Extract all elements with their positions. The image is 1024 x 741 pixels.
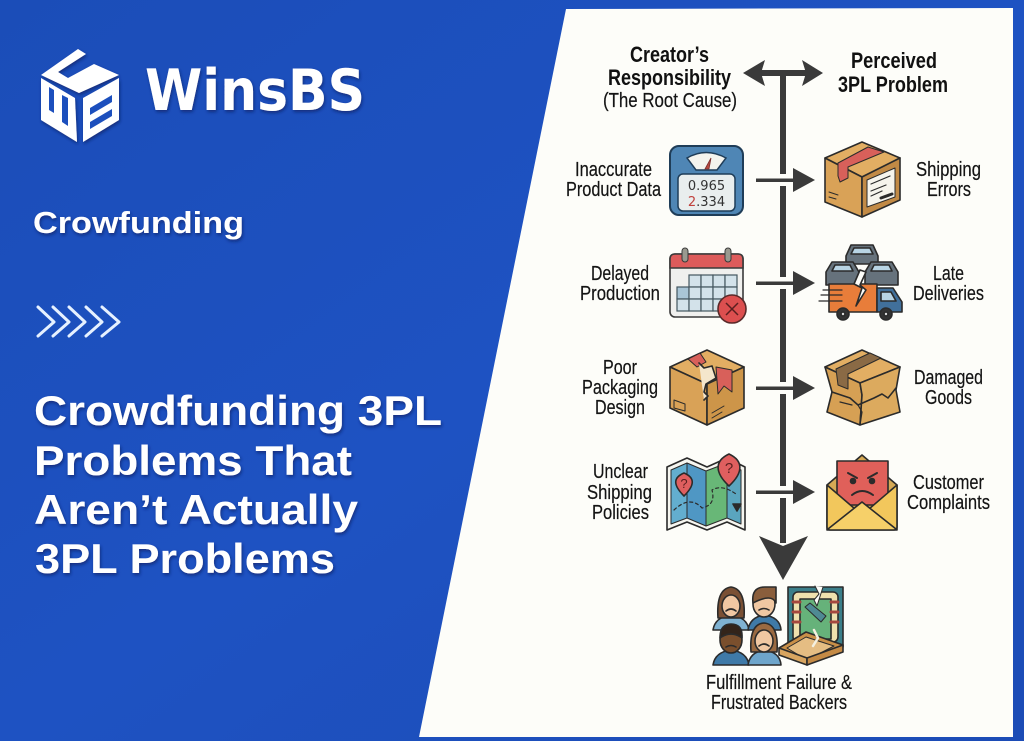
- icon: map with question pins: ?: [680, 476, 688, 491]
- row 4: [587, 454, 990, 530]
- text: customer complaints: Customer: [913, 472, 984, 494]
- arrow: row 2: [756, 271, 815, 295]
- text: poor packaging design: Packaging: [582, 377, 658, 399]
- text: customer complaints: Complaints: [907, 492, 990, 514]
- column heading: creator's responsibility: [603, 42, 737, 112]
- arrow: row 3: [756, 376, 815, 400]
- text: late deliveries: Deliveries: [913, 283, 984, 305]
- icon: angry envelope: [827, 455, 897, 530]
- text: damaged goods: [914, 367, 983, 409]
- person 2: [748, 587, 781, 630]
- icon: scale: [670, 146, 743, 215]
- row 2: [580, 245, 984, 323]
- text: fulfillment failure and frustrated backers: Frustrated Backers: [711, 692, 847, 714]
- text: shipping errors: Errors: [927, 179, 971, 201]
- text: poor packaging design: Design: [595, 397, 645, 419]
- text: inaccurate product data: [566, 159, 662, 201]
- column heading: perceived 3PL problem: [838, 48, 948, 97]
- person 1: [713, 587, 749, 630]
- text: inaccurate product data: Inaccurate: [575, 159, 652, 181]
- text: unclear shipping policies: [587, 461, 652, 524]
- icon: damaged box: [825, 350, 900, 425]
- icon: shipping box: [825, 142, 900, 217]
- title: 3PL Problems: [35, 535, 335, 582]
- title: Problems That: [34, 437, 352, 484]
- text: shipping errors: [916, 159, 981, 201]
- category label: Crowfunding: [33, 205, 244, 240]
- open box: [779, 630, 843, 665]
- title: Crowdfunding 3PL: [34, 387, 442, 434]
- column heading: creator's responsibility: Responsibility: [608, 65, 732, 90]
- text: poor packaging design: [582, 357, 658, 419]
- text: delayed production: [580, 263, 660, 305]
- icon: delayed truck: [819, 245, 902, 320]
- logo: WinsBS: [41, 49, 365, 142]
- icon: chevrons: [38, 307, 119, 336]
- title: [34, 387, 442, 582]
- row 1: [566, 142, 981, 217]
- text: delayed production: Production: [580, 283, 660, 305]
- text: shipping errors: Shipping: [916, 159, 981, 181]
- text: unclear shipping policies: Unclear: [593, 461, 648, 483]
- column heading: perceived 3PL problem: 3PL Problem: [838, 72, 948, 97]
- row 3: [582, 350, 983, 425]
- panel: white diagram sheet: [419, 8, 1013, 737]
- title: Aren’t Actually: [34, 486, 359, 533]
- arrow: central spine with two-way top and big down arrow: [743, 60, 823, 580]
- column heading: perceived 3PL problem: Perceived: [851, 48, 937, 73]
- text: delayed production: Delayed: [591, 263, 649, 285]
- board game: [788, 586, 843, 647]
- icon: map with question pins: ?: [725, 460, 733, 477]
- icon: calendar: [670, 248, 746, 323]
- text: late deliveries: [913, 263, 984, 305]
- icon: scale: 0.965: [688, 179, 725, 194]
- arrow: row 1: [756, 168, 815, 192]
- icon: frustrated backers and broken game box: [713, 586, 843, 665]
- text: late deliveries: Late: [933, 263, 964, 285]
- wordmark: WinsBS: [145, 58, 365, 124]
- text: unclear shipping policies: Shipping: [587, 482, 652, 504]
- text: damaged goods: Damaged: [914, 367, 983, 389]
- text: poor packaging design: Poor: [603, 357, 637, 379]
- arrow: row 4: [756, 480, 815, 504]
- text: inaccurate product data: Product Data: [566, 179, 662, 201]
- icon: cube logo: [41, 49, 119, 142]
- text: customer complaints: [907, 472, 990, 514]
- person 4: [748, 623, 781, 665]
- text: fulfillment failure and frustrated backers: [706, 672, 853, 714]
- person 3: [713, 624, 749, 665]
- column heading: creator's responsibility: (The Root Cause): [603, 90, 737, 112]
- icon: scale: 2.334: [688, 195, 725, 210]
- icon: map with question pins: [667, 454, 745, 530]
- text: unclear shipping policies: Policies: [592, 502, 649, 524]
- icon: torn box: [670, 350, 744, 425]
- text: fulfillment failure and frustrated backers: Fulfillment Failure &: [706, 672, 853, 694]
- column heading: creator's responsibility: Creator’s: [630, 42, 709, 67]
- text: damaged goods: Goods: [925, 387, 972, 409]
